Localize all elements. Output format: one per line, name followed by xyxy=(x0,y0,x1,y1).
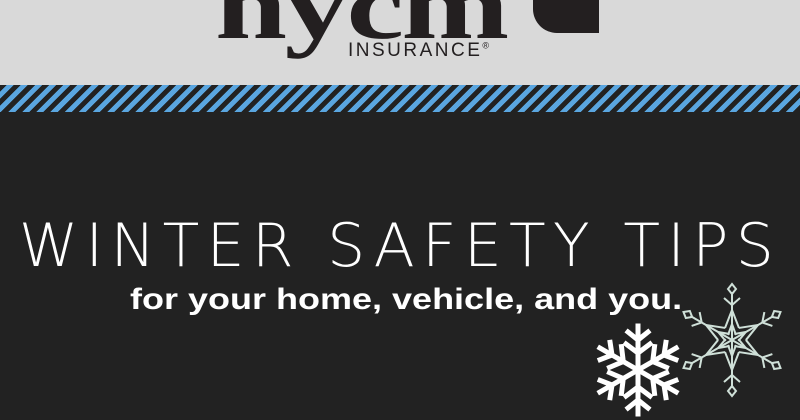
icon: outline snowflake xyxy=(682,282,782,398)
icon: white snowflake xyxy=(596,324,680,416)
striped divider xyxy=(0,85,800,112)
title: WINTER SAFETY TIPS xyxy=(19,211,781,281)
subtitle: for your home, vehicle, and you. xyxy=(130,283,682,316)
logo subtitle: INSURANCE® xyxy=(348,40,492,61)
logo xyxy=(215,0,599,61)
header: logo band xyxy=(0,0,800,85)
logo symbol xyxy=(533,0,599,33)
